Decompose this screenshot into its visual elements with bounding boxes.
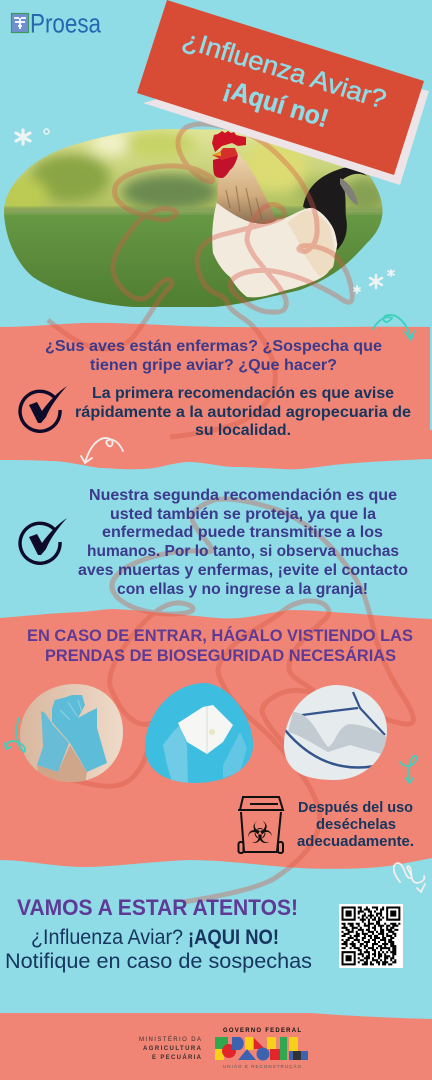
photo: gloves — [20, 684, 123, 782]
photo: safety glasses — [284, 685, 387, 780]
heading: questions — [45, 338, 382, 374]
decorative sparkles — [16, 129, 394, 293]
rooster comb — [212, 131, 246, 152]
icon: biohazard bin: ☣ — [247, 816, 273, 851]
text: second recommendation: usted también se proteja, ya que la — [110, 506, 376, 523]
text: second recommendation: enfermedad puede transmitirse a los — [102, 524, 383, 541]
footer: government logo — [215, 1028, 308, 1069]
text: first recommendation: La primera recomendación es que avise — [92, 385, 394, 402]
photo: mask — [144, 683, 253, 783]
salmon band 2 — [0, 609, 432, 869]
teal arrow top right — [373, 315, 414, 340]
footer: government logo: GOVERNO FEDERAL — [223, 1028, 301, 1034]
QR code — [339, 904, 403, 968]
text: second recommendation: aves muertas y enfermas, ¡evite el contacto — [78, 562, 408, 579]
heading: questions: ¿Sus aves están enfermas? ¿Sospecha que — [45, 338, 382, 355]
footer: ministry text: AGRICULTURA — [143, 1046, 202, 1052]
rooster beak and face — [212, 148, 238, 160]
footer: ministry text: MINISTÉRIO DA — [139, 1036, 201, 1043]
logo: Proesa — [12, 8, 102, 38]
icon: biohazard bin — [238, 797, 283, 853]
rooster wattle — [213, 155, 238, 178]
scribble line overlay — [27, 124, 413, 902]
text: closing slogan: Notifique en caso de sospechas — [5, 950, 312, 973]
icon: check mark 1 — [20, 386, 67, 431]
heading: biosecurity: EN CASO DE ENTRAR, HÁGALO VISTIENDO LAS — [27, 626, 413, 645]
rooster body — [212, 202, 337, 297]
rooster wing feathers — [287, 210, 335, 277]
heading: questions: tienen gripe aviar? ¿Que hacer? — [90, 357, 337, 374]
logo: Proesa: Proesa — [30, 8, 102, 38]
footer: government logo: UNIÃO E RECONSTRUÇÃO — [223, 1063, 301, 1069]
footer: ministry text: E PECUÁRIA — [152, 1054, 202, 1061]
heading: biosecurity — [27, 626, 413, 665]
rooster neck — [217, 150, 277, 224]
title banner — [137, 0, 424, 175]
text: disposal — [297, 799, 414, 850]
text: closing slogan — [5, 926, 312, 973]
text: first recommendation — [75, 385, 411, 439]
teal arrow left — [5, 718, 25, 752]
white arrow right — [394, 863, 425, 892]
text: first recommendation: su localidad. — [195, 422, 291, 439]
text: first recommendation: rápidamente a la autoridad agropecuaria de — [75, 404, 411, 421]
banner title: second line: ¡Aquí no! — [220, 73, 332, 133]
salmon footer band — [0, 1013, 432, 1080]
banner title: first line: ¿Influenza Aviar? — [179, 24, 390, 114]
text: second recommendation — [78, 487, 408, 598]
text: disposal: adecuadamente. — [297, 833, 414, 850]
title banner shadow — [143, 60, 429, 185]
text: second recommendation: con ellas y no ingrese a la granja! — [117, 581, 368, 598]
text: closing slogan: ¿Influenza Aviar? — [31, 926, 183, 949]
teal arrow right — [400, 756, 417, 783]
heading: biosecurity: PRENDAS DE BIOSEGURIDAD NECESÁRIAS — [45, 646, 396, 665]
rooster tail — [303, 168, 367, 250]
rooster neck streaks — [226, 186, 262, 220]
footer: ministry text — [139, 1036, 202, 1061]
text: disposal: Después del uso — [298, 799, 413, 816]
text: disposal: deséchelas — [316, 816, 396, 833]
text: closing slogan: ¡AQUI NO! — [188, 926, 279, 949]
text: second recommendation: Nuestra segunda recomendación es que — [89, 487, 397, 504]
white arrow — [81, 438, 123, 463]
icon: check mark 2 — [20, 518, 67, 563]
salmon band 1 — [0, 323, 432, 469]
heading: stay alert: VAMOS A ESTAR ATENTOS! — [17, 895, 298, 920]
photo: rooster on grass — [0, 125, 392, 312]
text: second recommendation: humanos. Por lo tanto, si observa muchas — [87, 543, 399, 560]
rooster grey tail feather — [340, 178, 358, 205]
